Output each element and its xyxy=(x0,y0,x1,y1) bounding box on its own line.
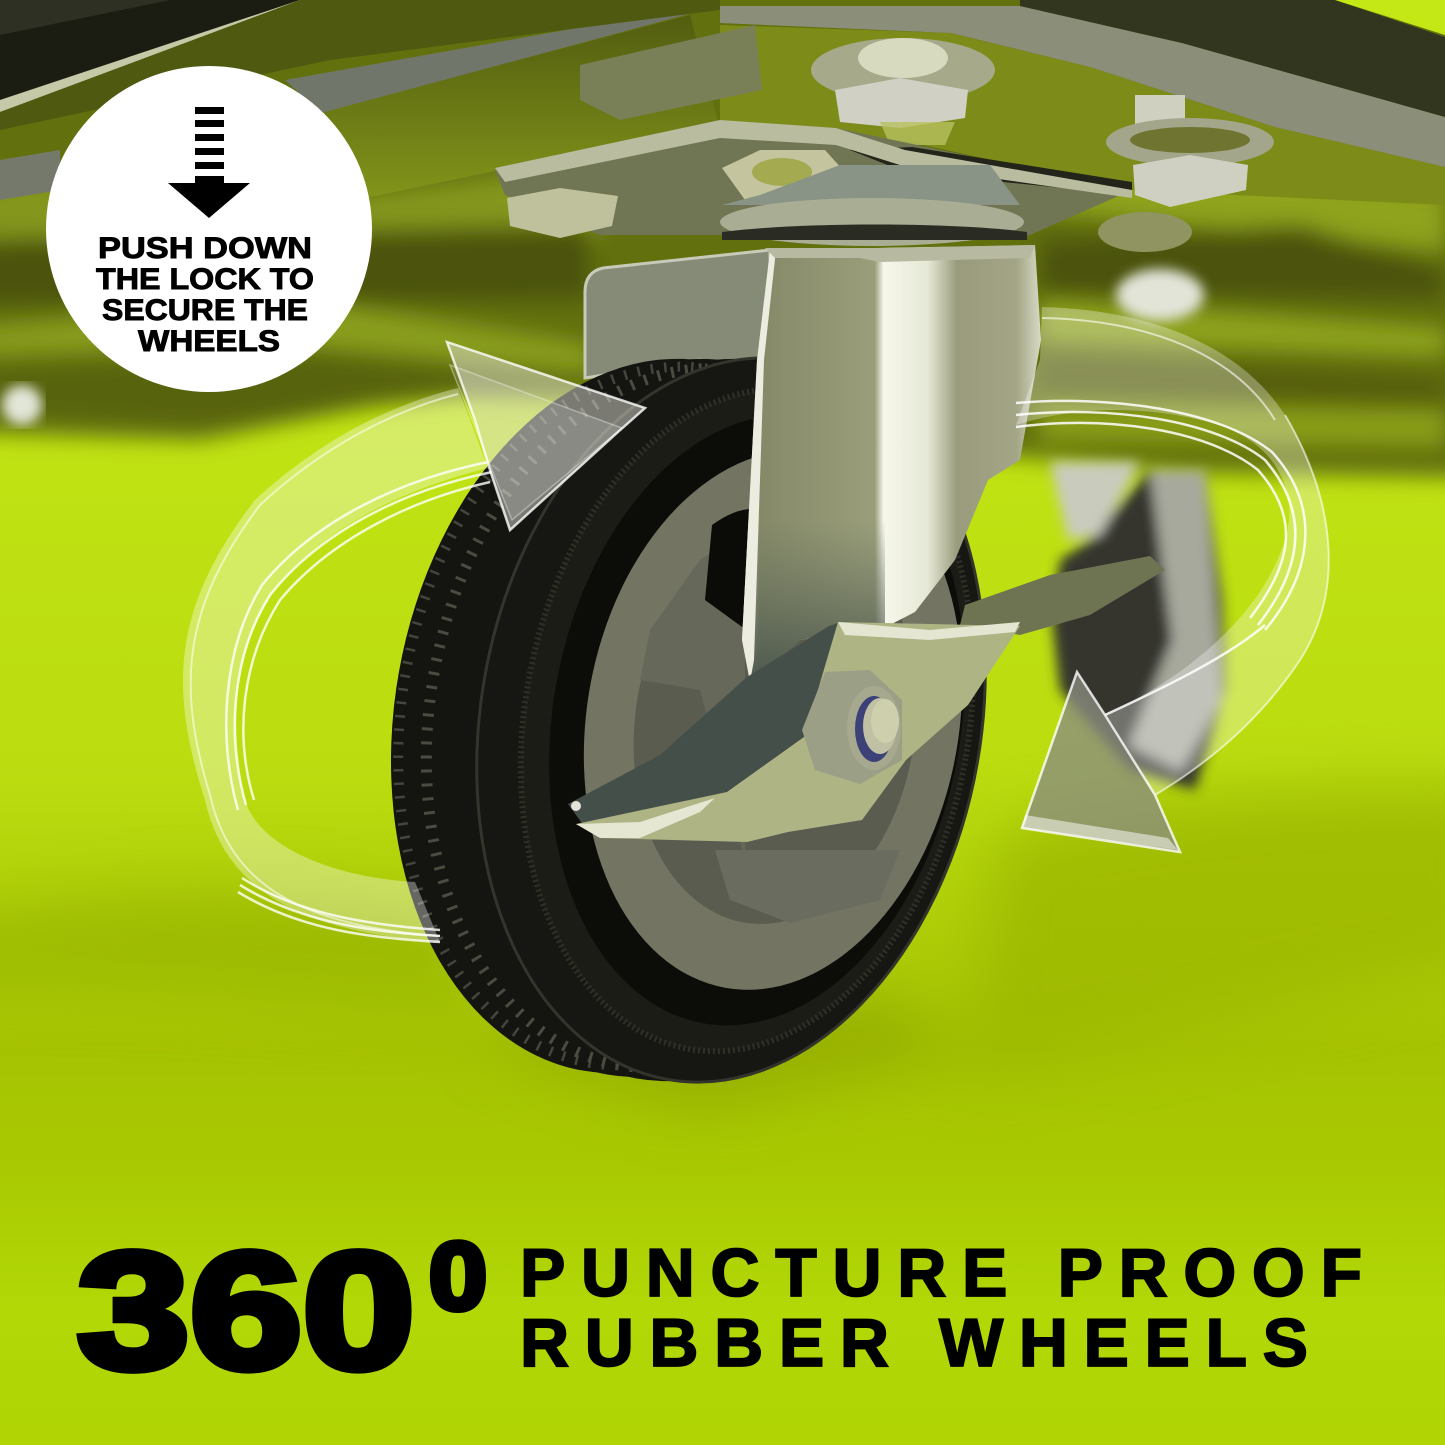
caster back flange xyxy=(585,250,770,378)
arrow: rotation left xyxy=(183,342,645,942)
swivel bearing xyxy=(722,165,1020,205)
floor shadows xyxy=(0,785,1445,1110)
headline: puncture proof rubber wheels: RUBBER WHEELS xyxy=(520,1305,1308,1381)
callout text: SECURE THE xyxy=(102,294,308,327)
headline: puncture proof rubber wheels: PUNCTURE PROOF xyxy=(520,1235,1362,1311)
callout text xyxy=(96,232,314,358)
callout text: PUSH DOWN xyxy=(98,232,312,265)
callout text: WHEELS xyxy=(138,325,280,358)
lever light side xyxy=(576,622,1020,842)
caster wheel xyxy=(336,317,1041,1123)
arrowhead xyxy=(1022,672,1180,852)
front frame rail xyxy=(0,0,300,100)
lever dark side xyxy=(568,622,841,826)
swivel plate xyxy=(495,122,1132,235)
caster fork xyxy=(742,245,1041,682)
ribbon xyxy=(1016,307,1329,795)
brake lever xyxy=(568,556,1165,842)
lit plate panel right xyxy=(720,25,1445,205)
blurred washer spot xyxy=(2,385,42,425)
callout text: THE LOCK TO xyxy=(96,263,314,296)
underside base xyxy=(0,0,1445,478)
headline: 360 degrees: 360 xyxy=(77,1219,415,1404)
headline: puncture proof rubber wheels xyxy=(520,1235,1362,1381)
arrowhead xyxy=(447,342,645,530)
callout: push down the lock xyxy=(46,66,372,392)
triple edge lines xyxy=(1016,401,1305,715)
ribbon xyxy=(183,388,488,942)
rear bolts xyxy=(580,25,1274,252)
headline: 360 degrees xyxy=(77,1219,487,1404)
lit plate panel left xyxy=(0,15,720,205)
rear wheel, out of focus xyxy=(1050,269,1225,790)
cart underside: metal platform xyxy=(0,0,1445,478)
tyre tread xyxy=(336,318,1009,1122)
tyre face xyxy=(421,317,1041,1123)
triple edge lines xyxy=(226,462,492,942)
lever pad xyxy=(960,556,1165,635)
grey reflection strip xyxy=(285,8,689,113)
icon: striped down arrow xyxy=(168,107,250,218)
hub xyxy=(543,420,1003,1020)
plate nuts xyxy=(507,188,618,238)
headline: 360 degrees: 0 xyxy=(429,1223,487,1330)
axle bolt xyxy=(802,670,902,784)
arrow: rotation right xyxy=(1016,307,1329,852)
